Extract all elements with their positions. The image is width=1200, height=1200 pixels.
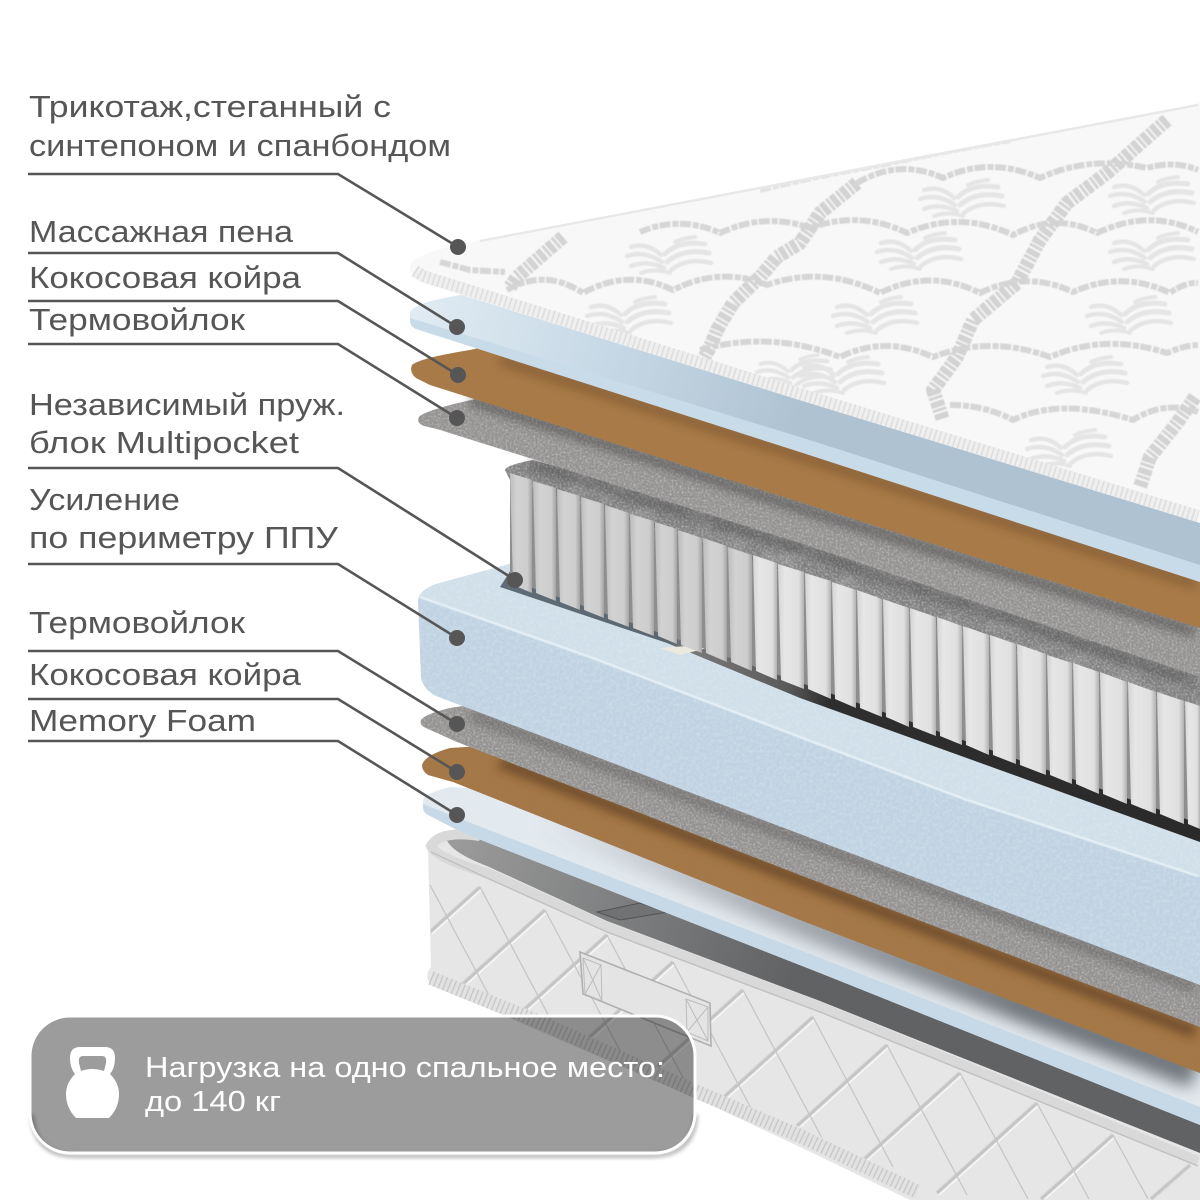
block ridge [420, 597, 1198, 876]
panel text [145, 1052, 665, 1118]
callout: coconut coir lower [28, 657, 465, 780]
layer: upper thermofelt [418, 350, 1200, 677]
layer: lower coconut coir [422, 745, 1200, 1073]
callout: memory foam: Memory Foam [29, 703, 256, 738]
callout: thermofelt upper [28, 302, 465, 426]
mattress bottom welt [431, 978, 918, 1192]
callout: perimeter foam: Усиление [29, 482, 180, 517]
spring block base [500, 540, 1200, 842]
layer: massage foam [410, 250, 1200, 582]
layer: lower thermofelt [421, 700, 1200, 1027]
callout: coconut coir upper [28, 260, 466, 383]
shadow under massage foam [500, 360, 1195, 584]
panel text: Нагрузка на одно спальное место: [145, 1052, 665, 1084]
callout: massage foam [28, 214, 465, 335]
quilted diamonds [430, 885, 1190, 1199]
callout: thermofelt upper: Термовойлок [29, 302, 245, 337]
white tag [660, 645, 707, 655]
shadow under lower felt [500, 762, 1195, 1032]
spring backing [510, 480, 1200, 824]
callout: memory foam [28, 703, 465, 823]
callout: spring block: Независимый пруж. [29, 387, 345, 422]
foam front band [410, 318, 1200, 582]
layer: pocket springs [510, 473, 1200, 829]
mattress body [427, 834, 1200, 1200]
block top face [420, 560, 1200, 877]
callout: spring block: блок Multipocket [29, 425, 299, 460]
callout: thermofelt lower [28, 605, 465, 732]
shadow under upper coir [470, 400, 1195, 632]
load capacity panel [30, 1016, 696, 1156]
callout: thermofelt lower: Термовойлок [29, 605, 245, 640]
callout: coconut coir lower: Кокосовая койра [29, 657, 302, 692]
mattress inner surface [446, 828, 1200, 1153]
callout: cover: Трикотаж,стеганный с [29, 89, 391, 124]
shadow under upper felt [530, 464, 1195, 682]
callout: cover: синтепоном и спанбондом [29, 128, 451, 163]
layer: spring block top [505, 460, 1200, 725]
mattress rim [431, 834, 1198, 1161]
foam shadow under coir [540, 815, 1195, 1074]
callout: perimeter foam [28, 482, 465, 646]
layer: memory foam [423, 787, 1200, 1125]
layer: quilted top cover [410, 103, 1200, 523]
cover ornament [440, 120, 1198, 487]
base mattress with quilted side [427, 828, 1200, 1200]
strap inside mattress [597, 903, 668, 920]
callout: massage foam: Массажная пена [29, 214, 294, 249]
cover welt [415, 271, 1198, 516]
shadow under foam block [470, 715, 1195, 988]
icon: kettlebell [66, 1047, 119, 1118]
panel text: до 140 кг [145, 1086, 281, 1118]
callout: perimeter foam: по периметру ППУ [29, 520, 338, 555]
foam front band [423, 804, 1200, 1125]
mattress handle [580, 952, 711, 1046]
layer: upper coconut coir [411, 300, 1200, 628]
callout: coconut coir upper: Кокосовая койра [29, 260, 302, 295]
layer: foam perimeter block [418, 560, 1200, 985]
callout: cover [28, 89, 466, 255]
callout: spring block [28, 387, 523, 588]
